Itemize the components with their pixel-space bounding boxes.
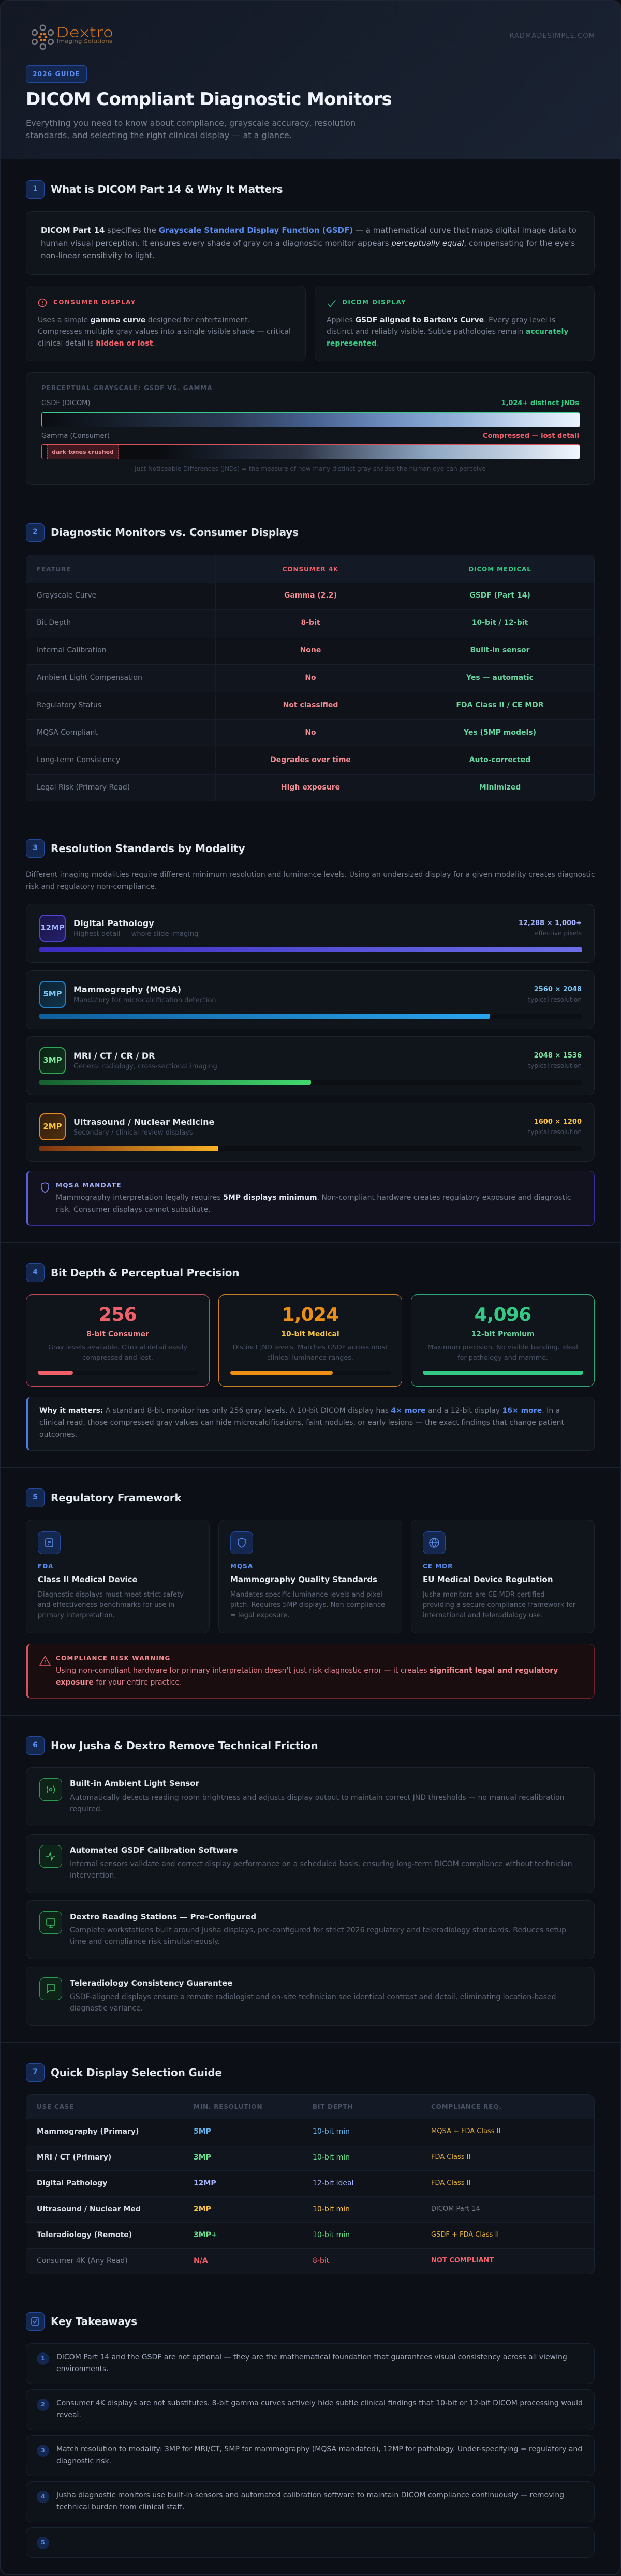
table header: FEATURE xyxy=(37,565,71,573)
bar xyxy=(423,1371,583,1375)
selection guide table xyxy=(26,2094,595,2274)
description: and effectiveness benchmarks for use in xyxy=(38,1601,174,1609)
icon: checklist xyxy=(31,2317,39,2326)
label: 10-bit Medical xyxy=(281,1330,339,1338)
panel: consumer display xyxy=(26,286,306,361)
section 2 heading: 2 xyxy=(33,528,38,536)
gamma label: Gamma (Consumer) xyxy=(41,432,110,440)
description: compressed and lost. xyxy=(82,1354,153,1362)
section 3 intro: risk and regulatory non-compliance. xyxy=(26,883,157,891)
text: diagnostic variance. xyxy=(70,2004,143,2013)
number 2: 2 xyxy=(41,2401,45,2408)
callout text xyxy=(39,1407,564,1439)
table header: MIN. RESOLUTION xyxy=(194,2103,262,2110)
takeaway 4 xyxy=(26,2481,595,2522)
description: Mandatory for microcalcification detection xyxy=(73,996,216,1004)
section 1 heading: 1 xyxy=(33,185,38,193)
table header xyxy=(26,2095,594,2119)
consumer heading: CONSUMER DISPLAY xyxy=(53,299,136,306)
definition text xyxy=(41,226,576,260)
row: regulatory status: FDA Class II / CE MDR xyxy=(456,701,544,709)
number 5: 5 xyxy=(41,2539,45,2546)
section 7 heading xyxy=(26,2063,222,2082)
section 6 heading: 6 xyxy=(33,1741,38,1749)
callout title: MQSA MANDATE xyxy=(56,1182,122,1189)
panel: DICOM display xyxy=(315,286,595,361)
takeaway text: Jusha diagnostic monitors use built-in sensors and automated calibration software to maintain DICOM compliance continuously — removing xyxy=(56,2491,564,2499)
label: 8-bit Consumer xyxy=(86,1330,149,1338)
row: bit depth: Bit Depth xyxy=(37,619,71,627)
row: ultrasound: 2MP xyxy=(194,2205,211,2213)
text: Complete workstations built around Jusha displays, pre-configured for strict 2026 regulatory and teleradiology standards. Reduces setup xyxy=(70,1926,566,1934)
row: MRI / CT xyxy=(26,2145,594,2171)
description: General radiology, cross-sectional imaging xyxy=(73,1063,217,1070)
badge: 2MP xyxy=(39,1113,66,1140)
site name: RADMADESIMPLE.COM xyxy=(509,32,595,40)
resolution note: typical resolution xyxy=(528,996,582,1003)
DICOM heading: DICOM DISPLAY xyxy=(342,299,406,306)
row: long-term consistency: Auto-corrected xyxy=(469,756,530,764)
icon: monitor xyxy=(39,1911,62,1934)
row: bit depth xyxy=(26,610,594,637)
logo: Dextro Imaging Solutions xyxy=(31,24,113,50)
takeaway 2 xyxy=(26,2389,595,2430)
row: mammography: 10-bit min xyxy=(313,2127,350,2136)
tag: MQSA xyxy=(230,1562,253,1570)
takeaway text xyxy=(56,2491,564,2511)
title: Automated GSDF Calibration Software xyxy=(70,1845,238,1855)
DICOM text xyxy=(327,316,568,348)
number: 4,096 xyxy=(475,1304,531,1326)
description: providing a secure compliance framework for xyxy=(423,1601,575,1609)
description xyxy=(230,1591,385,1619)
section 4 heading xyxy=(26,1263,239,1282)
tag: CE MDR xyxy=(423,1562,453,1570)
title: Dextro Reading Stations — Pre-Configured xyxy=(70,1912,256,1922)
row: regulatory status: Not classified xyxy=(283,701,338,709)
description xyxy=(38,1591,184,1619)
row: mammography: MQSA + FDA Class II xyxy=(431,2127,500,2135)
definition text: non-linear sensitivity to light. xyxy=(41,251,155,260)
row: pathology: Digital Pathology xyxy=(37,2179,107,2187)
section 1 heading xyxy=(26,180,283,199)
text xyxy=(70,1860,572,1880)
badge: 2026 guide xyxy=(26,65,87,83)
takeaway 5 xyxy=(26,2527,595,2558)
icon: check xyxy=(328,300,335,307)
row: regulatory status: Regulatory Status xyxy=(37,701,101,709)
takeaway text: reveal. xyxy=(56,2411,81,2419)
row: MQSA compliant: No xyxy=(305,728,316,737)
subtitle: standards, and selecting the right clinical display — at a glance. xyxy=(26,130,292,140)
panel: ambient light sensor xyxy=(26,1767,595,1826)
description xyxy=(422,1591,575,1619)
row: grayscale curve: Grayscale Curve xyxy=(37,591,96,600)
resolution: 12,288 × 1,000+ xyxy=(519,919,582,927)
description: pitch. Requires 5MP displays. Non-compliance xyxy=(230,1601,385,1609)
warning text: exposure for your entire practice. xyxy=(56,1678,182,1687)
name: Mammography (MQSA) xyxy=(73,985,181,994)
description: Gray levels available. Clinical detail easily xyxy=(48,1344,187,1351)
row: teleradiology: Teleradiology (Remote) xyxy=(37,2231,132,2239)
takeaway text: Match resolution to modality: 3MP for MRI/CT, 5MP for mammography (MQSA mandated), 12MP for pathology. Under-specifying = regulatory and xyxy=(56,2445,582,2453)
row: teleradiology xyxy=(26,2223,594,2249)
row: legal risk: Minimized xyxy=(479,783,521,792)
section 2 heading: Diagnostic Monitors vs. Consumer Displays xyxy=(51,526,299,539)
section 3 heading: Resolution Standards by Modality xyxy=(51,842,245,855)
resolution note: effective pixels xyxy=(535,930,582,937)
description xyxy=(427,1344,578,1362)
takeaway text: diagnostic risk. xyxy=(56,2457,111,2465)
consumer text xyxy=(38,316,291,348)
bar track xyxy=(38,1371,198,1375)
row: ambient light: No xyxy=(305,674,316,682)
warning text: Using non-compliant hardware for primary interpretation doesn't just risk diagnostic error — it creates significant legal and regulatory xyxy=(56,1666,558,1675)
description: Mandates specific luminance levels and pixel xyxy=(230,1591,382,1599)
row: pathology: FDA Class II xyxy=(431,2179,470,2187)
badge: 5MP xyxy=(39,981,66,1008)
callout text: Why it matters: A standard 8-bit monitor has only 256 gray levels. A 10-bit DICOM display has 4× more and a 12-bit display 16× more. In a xyxy=(39,1407,560,1415)
icon: document xyxy=(38,1531,61,1554)
description: primary interpretation. xyxy=(38,1612,115,1619)
text: GSDF-aligned displays ensure a remote radiologist and on-site technician see identical contrast and detail, eliminating location-based xyxy=(70,1993,556,2001)
description: Distinct JND levels. Matches GSDF across most xyxy=(233,1344,388,1351)
icon: sensor xyxy=(39,1778,62,1801)
icon: globe xyxy=(423,1531,446,1554)
number 2 xyxy=(37,2399,49,2411)
row: long-term consistency: Degrades over time xyxy=(270,756,351,764)
panel: perceptual grayscale chart xyxy=(26,372,595,485)
title: EU Medical Device Regulation xyxy=(423,1575,553,1584)
section 6 heading: How Jusha & Dextro Remove Technical Friction xyxy=(51,1739,318,1752)
text: intervention. xyxy=(70,1871,116,1880)
row: pathology: 12-bit ideal xyxy=(313,2179,353,2187)
row: teleradiology: GSDF + FDA Class II xyxy=(431,2231,499,2239)
row: internal calibration xyxy=(26,637,594,665)
key takeaways heading xyxy=(26,2312,137,2331)
takeaway text: environments. xyxy=(56,2365,109,2373)
description xyxy=(48,1344,187,1362)
description: Secondary / clinical review displays xyxy=(73,1129,193,1137)
section 3 heading xyxy=(26,839,245,858)
row: mammography: 5MP xyxy=(194,2127,211,2136)
definition text: human visual perception. It ensures every shade of gray on a diagnostic monitor appears perceptually equal, compensating for the eye's xyxy=(41,239,575,248)
icon: shield xyxy=(41,1182,49,1193)
row: long-term consistency xyxy=(26,747,594,775)
row: ultrasound: Ultrasound / Nuclear Med xyxy=(37,2205,141,2213)
table header xyxy=(26,555,594,583)
GSDF label: GSDF (DICOM) xyxy=(41,399,90,407)
consumer text: clinical detail is hidden or lost. xyxy=(38,339,155,348)
panel: 8-bit xyxy=(26,1294,210,1387)
title: DICOM Compliant Diagnostic Monitors xyxy=(26,89,392,110)
row: bit depth: 10-bit / 12-bit xyxy=(472,619,528,627)
definition text: DICOM Part 14 specifies the Grayscale Standard Display Function (GSDF) — a mathematical curve that maps digital image data to xyxy=(41,226,576,235)
warning title: COMPLIANCE RISK WARNING xyxy=(56,1655,170,1662)
text: time and compliance risk simultaneously. xyxy=(70,1938,220,1946)
key takeaways heading: Key Takeaways xyxy=(51,2315,137,2328)
takeaway text xyxy=(56,2353,567,2373)
badge: 5MP: 5MP xyxy=(43,989,62,999)
row: mammography: Mammography (Primary) xyxy=(37,2127,139,2136)
takeaway text: DICOM Part 14 and the GSDF are not optional — they are the mathematical foundation that guarantees visual consistency across all viewing xyxy=(56,2353,567,2361)
comparison table xyxy=(26,555,595,801)
title: Class II Medical Device xyxy=(38,1575,138,1584)
row: MRI / CT: 10-bit min xyxy=(313,2153,350,2162)
description: Jusha monitors are CE MDR certified — xyxy=(423,1591,554,1599)
text xyxy=(70,1993,556,2013)
logo: Dextro Imaging Solutions: Dextro xyxy=(56,25,113,40)
row: consumer 4K: Consumer 4K (Any Read) xyxy=(37,2257,128,2265)
row: ultrasound xyxy=(26,2197,594,2223)
callout: MQSA mandate xyxy=(26,1171,595,1226)
panel: FDA xyxy=(26,1520,210,1633)
callout: compliance risk warning xyxy=(26,1644,595,1699)
row: MQSA compliant: Yes (5MP models) xyxy=(464,728,536,737)
takeaway text xyxy=(56,2445,582,2465)
panel: GSDF calibration xyxy=(26,1834,595,1893)
row: internal calibration: None xyxy=(300,646,321,654)
table header: CONSUMER 4K xyxy=(283,565,338,573)
panel: CE MDR xyxy=(411,1520,595,1633)
resolution: 2048 × 1536 xyxy=(534,1052,582,1060)
DICOM text: distinct and reliably visible. Subtle pathologies remain accurately xyxy=(327,327,568,336)
callout text: clinical read, those compressed gray values can hide microcalcifications, faint nodules, or early lesions — the exact findings that change patient xyxy=(39,1419,564,1427)
DICOM text: Applies GSDF aligned to Barten's Curve. Every gray level is xyxy=(327,316,555,324)
bar track xyxy=(39,1014,582,1019)
title: Teleradiology Consistency Guarantee xyxy=(70,1978,232,1988)
table header: BIT DEPTH xyxy=(313,2103,353,2110)
description: for pathology and mammo. xyxy=(457,1354,548,1362)
description: Diagnostic displays must meet strict safety xyxy=(38,1591,184,1599)
GSDF gradient bar xyxy=(41,412,580,427)
text: Internal sensors validate and correct display performance on a scheduled basis, ensuring long-term DICOM compliance without technician xyxy=(70,1860,572,1868)
text xyxy=(70,1926,566,1946)
row: long-term consistency: Long-term Consistency xyxy=(37,756,120,764)
name: MRI / CT / CR / DR xyxy=(73,1051,155,1061)
row: legal risk xyxy=(26,775,594,802)
section 6 heading xyxy=(26,1736,318,1755)
chart heading: PERCEPTUAL GRAYSCALE: GSDF VS. GAMMA xyxy=(41,384,212,392)
row: pathology xyxy=(26,2171,594,2197)
panel: MRI / CT xyxy=(26,1036,595,1095)
section 3 intro xyxy=(26,871,595,891)
number 5 xyxy=(37,2537,49,2549)
warning text xyxy=(56,1666,558,1687)
table header: DICOM MEDICAL xyxy=(468,565,531,573)
row: MRI / CT: FDA Class II xyxy=(431,2153,470,2161)
row: MQSA compliant: MQSA Compliant xyxy=(37,728,98,737)
icon: alert xyxy=(38,298,47,307)
panel: digital pathology xyxy=(26,904,595,963)
description: Maximum precision. No visible banding. Ideal xyxy=(427,1344,578,1351)
takeaway text xyxy=(56,2399,583,2419)
bar xyxy=(39,947,582,952)
badge: 12MP: 12MP xyxy=(40,923,65,932)
resolution: 1600 × 1200 xyxy=(534,1118,582,1126)
section 3 intro: Different imaging modalities require different minimum resolution and luminance levels. Using an undersized display for a given modality creates diagnostic xyxy=(26,871,595,879)
description: = legal exposure. xyxy=(230,1612,289,1619)
panel: 10-bit xyxy=(218,1294,402,1387)
panel: mammography xyxy=(26,970,595,1029)
DICOM text: represented. xyxy=(327,339,379,348)
section 1 heading: What is DICOM Part 14 & Why It Matters xyxy=(51,183,283,196)
bar xyxy=(39,1014,490,1019)
bar xyxy=(39,1146,218,1151)
row: ambient light xyxy=(26,665,594,692)
row: MQSA compliant xyxy=(26,720,594,747)
description: international and teleradiology use. xyxy=(423,1612,543,1619)
badge: 3MP xyxy=(39,1047,66,1074)
panel: 12-bit xyxy=(411,1294,595,1387)
icon: warning triangle xyxy=(39,1656,51,1666)
tag: FDA xyxy=(38,1562,53,1570)
panel: MQSA xyxy=(218,1520,402,1633)
number 1: 1 xyxy=(41,2355,45,2362)
section 5 heading: 5 xyxy=(33,1493,38,1501)
badge: 12MP xyxy=(39,915,66,942)
gamma value: Compressed — lost detail xyxy=(483,432,579,440)
section 3 heading: 3 xyxy=(33,844,38,852)
number 4 xyxy=(37,2491,49,2503)
row: grayscale curve xyxy=(26,583,594,610)
takeaway text: Consumer 4K displays are not substitutes. 8-bit gamma curves actively hide subtle clinical findings that 10-bit or 12-bit DICOM processing would xyxy=(56,2399,583,2407)
text: Automatically detects reading room brightness and adjusts display output to maintain correct JND thresholds — no manual recalibration xyxy=(70,1794,564,1802)
row: mammography xyxy=(26,2119,594,2145)
callout text: Mammography interpretation legally requires 5MP displays minimum. Non-compliant hardware creates regulatory exposure and diagnostic xyxy=(56,1194,571,1202)
number: 256 xyxy=(99,1304,137,1326)
row: consumer 4K: N/A xyxy=(194,2257,208,2265)
description xyxy=(233,1344,388,1362)
row: consumer 4K: 8-bit xyxy=(313,2257,329,2265)
takeaway 3 xyxy=(26,2435,595,2476)
row: MRI / CT: 3MP xyxy=(194,2153,211,2162)
row: teleradiology: 10-bit min xyxy=(313,2231,350,2239)
callout text: outcomes. xyxy=(39,1431,77,1439)
bar xyxy=(38,1371,73,1375)
row: bit depth: 8-bit xyxy=(301,619,320,627)
panel: Part 14 definition xyxy=(26,211,595,275)
panel: reading stations xyxy=(26,1900,595,1959)
bar track xyxy=(230,1371,391,1375)
gamma gradient bar xyxy=(41,444,580,459)
row: MRI / CT: MRI / CT (Primary) xyxy=(37,2153,111,2162)
icon: pulse xyxy=(39,1845,62,1868)
subtitle xyxy=(26,118,356,140)
section 4 heading: Bit Depth & Perceptual Precision xyxy=(51,1267,239,1279)
crushed tones overlay: dark tones crushed xyxy=(52,449,114,455)
crushed tones overlay xyxy=(47,445,119,459)
panel: teleradiology guarantee xyxy=(26,1967,595,2026)
icon: message xyxy=(39,1977,62,2000)
label: 12-bit Premium xyxy=(471,1330,535,1338)
consumer text: Uses a simple gamma curve designed for entertainment. xyxy=(38,316,250,324)
number 3 xyxy=(37,2445,49,2457)
takeaway 1 xyxy=(26,2343,595,2384)
description: Highest detail — whole slide imaging xyxy=(73,930,198,938)
row: ultrasound: 10-bit min xyxy=(313,2205,350,2213)
resolution: 2560 × 2048 xyxy=(534,986,582,993)
header xyxy=(0,0,621,159)
JND note: Just Noticeable Differences (JNDs) = the measure of how many distinct gray shades the human eye can perceive xyxy=(135,465,486,472)
table header: COMPLIANCE REQ. xyxy=(431,2103,502,2110)
section 2 heading xyxy=(26,523,299,542)
row: grayscale curve: Gamma (2.2) xyxy=(284,591,337,600)
row: consumer 4K: NOT COMPLIANT xyxy=(431,2257,494,2265)
subtitle: Everything you need to know about compliance, grayscale accuracy, resolution xyxy=(26,118,356,128)
row: internal calibration: Internal Calibration xyxy=(37,646,107,654)
section 4 heading: 4 xyxy=(33,1268,38,1276)
consumer text: Compresses multiple gray values into a single visible shade — critical xyxy=(38,327,291,336)
badge: 2MP: 2MP xyxy=(43,1122,62,1131)
icon: shield xyxy=(230,1531,253,1554)
row: ambient light: Ambient Light Compensation xyxy=(37,674,142,682)
name: Ultrasound / Nuclear Medicine xyxy=(73,1117,214,1127)
row: consumer 4K xyxy=(26,2249,594,2274)
number: 1,024 xyxy=(282,1304,338,1326)
row: teleradiology: 3MP+ xyxy=(194,2231,217,2239)
panel: ultrasound xyxy=(26,1103,595,1162)
badge: 3MP: 3MP xyxy=(43,1055,62,1065)
table header: USE CASE xyxy=(37,2103,74,2110)
row: grayscale curve: GSDF (Part 14) xyxy=(469,591,530,600)
takeaway text: technical burden from clinical staff. xyxy=(56,2503,184,2511)
row: internal calibration: Built-in sensor xyxy=(470,646,530,654)
callout: why it matters xyxy=(26,1397,595,1451)
title: Mammography Quality Standards xyxy=(230,1575,377,1584)
callout text xyxy=(56,1194,571,1214)
row: legal risk: Legal Risk (Primary Read) xyxy=(37,783,130,792)
GSDF value: 1,024+ distinct JNDs xyxy=(501,399,579,407)
bar track xyxy=(39,1146,582,1151)
callout text: risk. Consumer displays cannot substitute. xyxy=(56,1205,210,1214)
number 1 xyxy=(37,2352,49,2365)
number 4: 4 xyxy=(41,2493,45,2500)
badge: 2026 guide: 2026 GUIDE xyxy=(33,70,80,78)
number 3: 3 xyxy=(41,2447,45,2454)
text: required. xyxy=(70,1805,102,1813)
text xyxy=(70,1794,564,1813)
row: regulatory status xyxy=(26,692,594,720)
description: clinical luminance ranges. xyxy=(267,1354,353,1362)
bar xyxy=(39,1080,311,1085)
title: Built-in Ambient Light Sensor xyxy=(70,1779,199,1788)
logo: Dextro Imaging Solutions: Imaging Solutions xyxy=(57,39,112,44)
row: pathology: 12MP xyxy=(194,2179,216,2187)
section 7 heading: 7 xyxy=(33,2068,38,2076)
section 7 heading: Quick Display Selection Guide xyxy=(51,2066,222,2079)
section 5 heading: Regulatory Framework xyxy=(51,1492,182,1504)
resolution note: typical resolution xyxy=(528,1062,582,1069)
resolution note: typical resolution xyxy=(528,1128,582,1136)
bar track xyxy=(39,1080,582,1085)
row: legal risk: High exposure xyxy=(281,783,340,792)
row: ambient light: Yes — automatic xyxy=(466,674,534,682)
section 5 heading xyxy=(26,1488,182,1507)
bar xyxy=(230,1371,333,1375)
row: ultrasound: DICOM Part 14 xyxy=(431,2205,480,2213)
name: Digital Pathology xyxy=(73,918,154,928)
